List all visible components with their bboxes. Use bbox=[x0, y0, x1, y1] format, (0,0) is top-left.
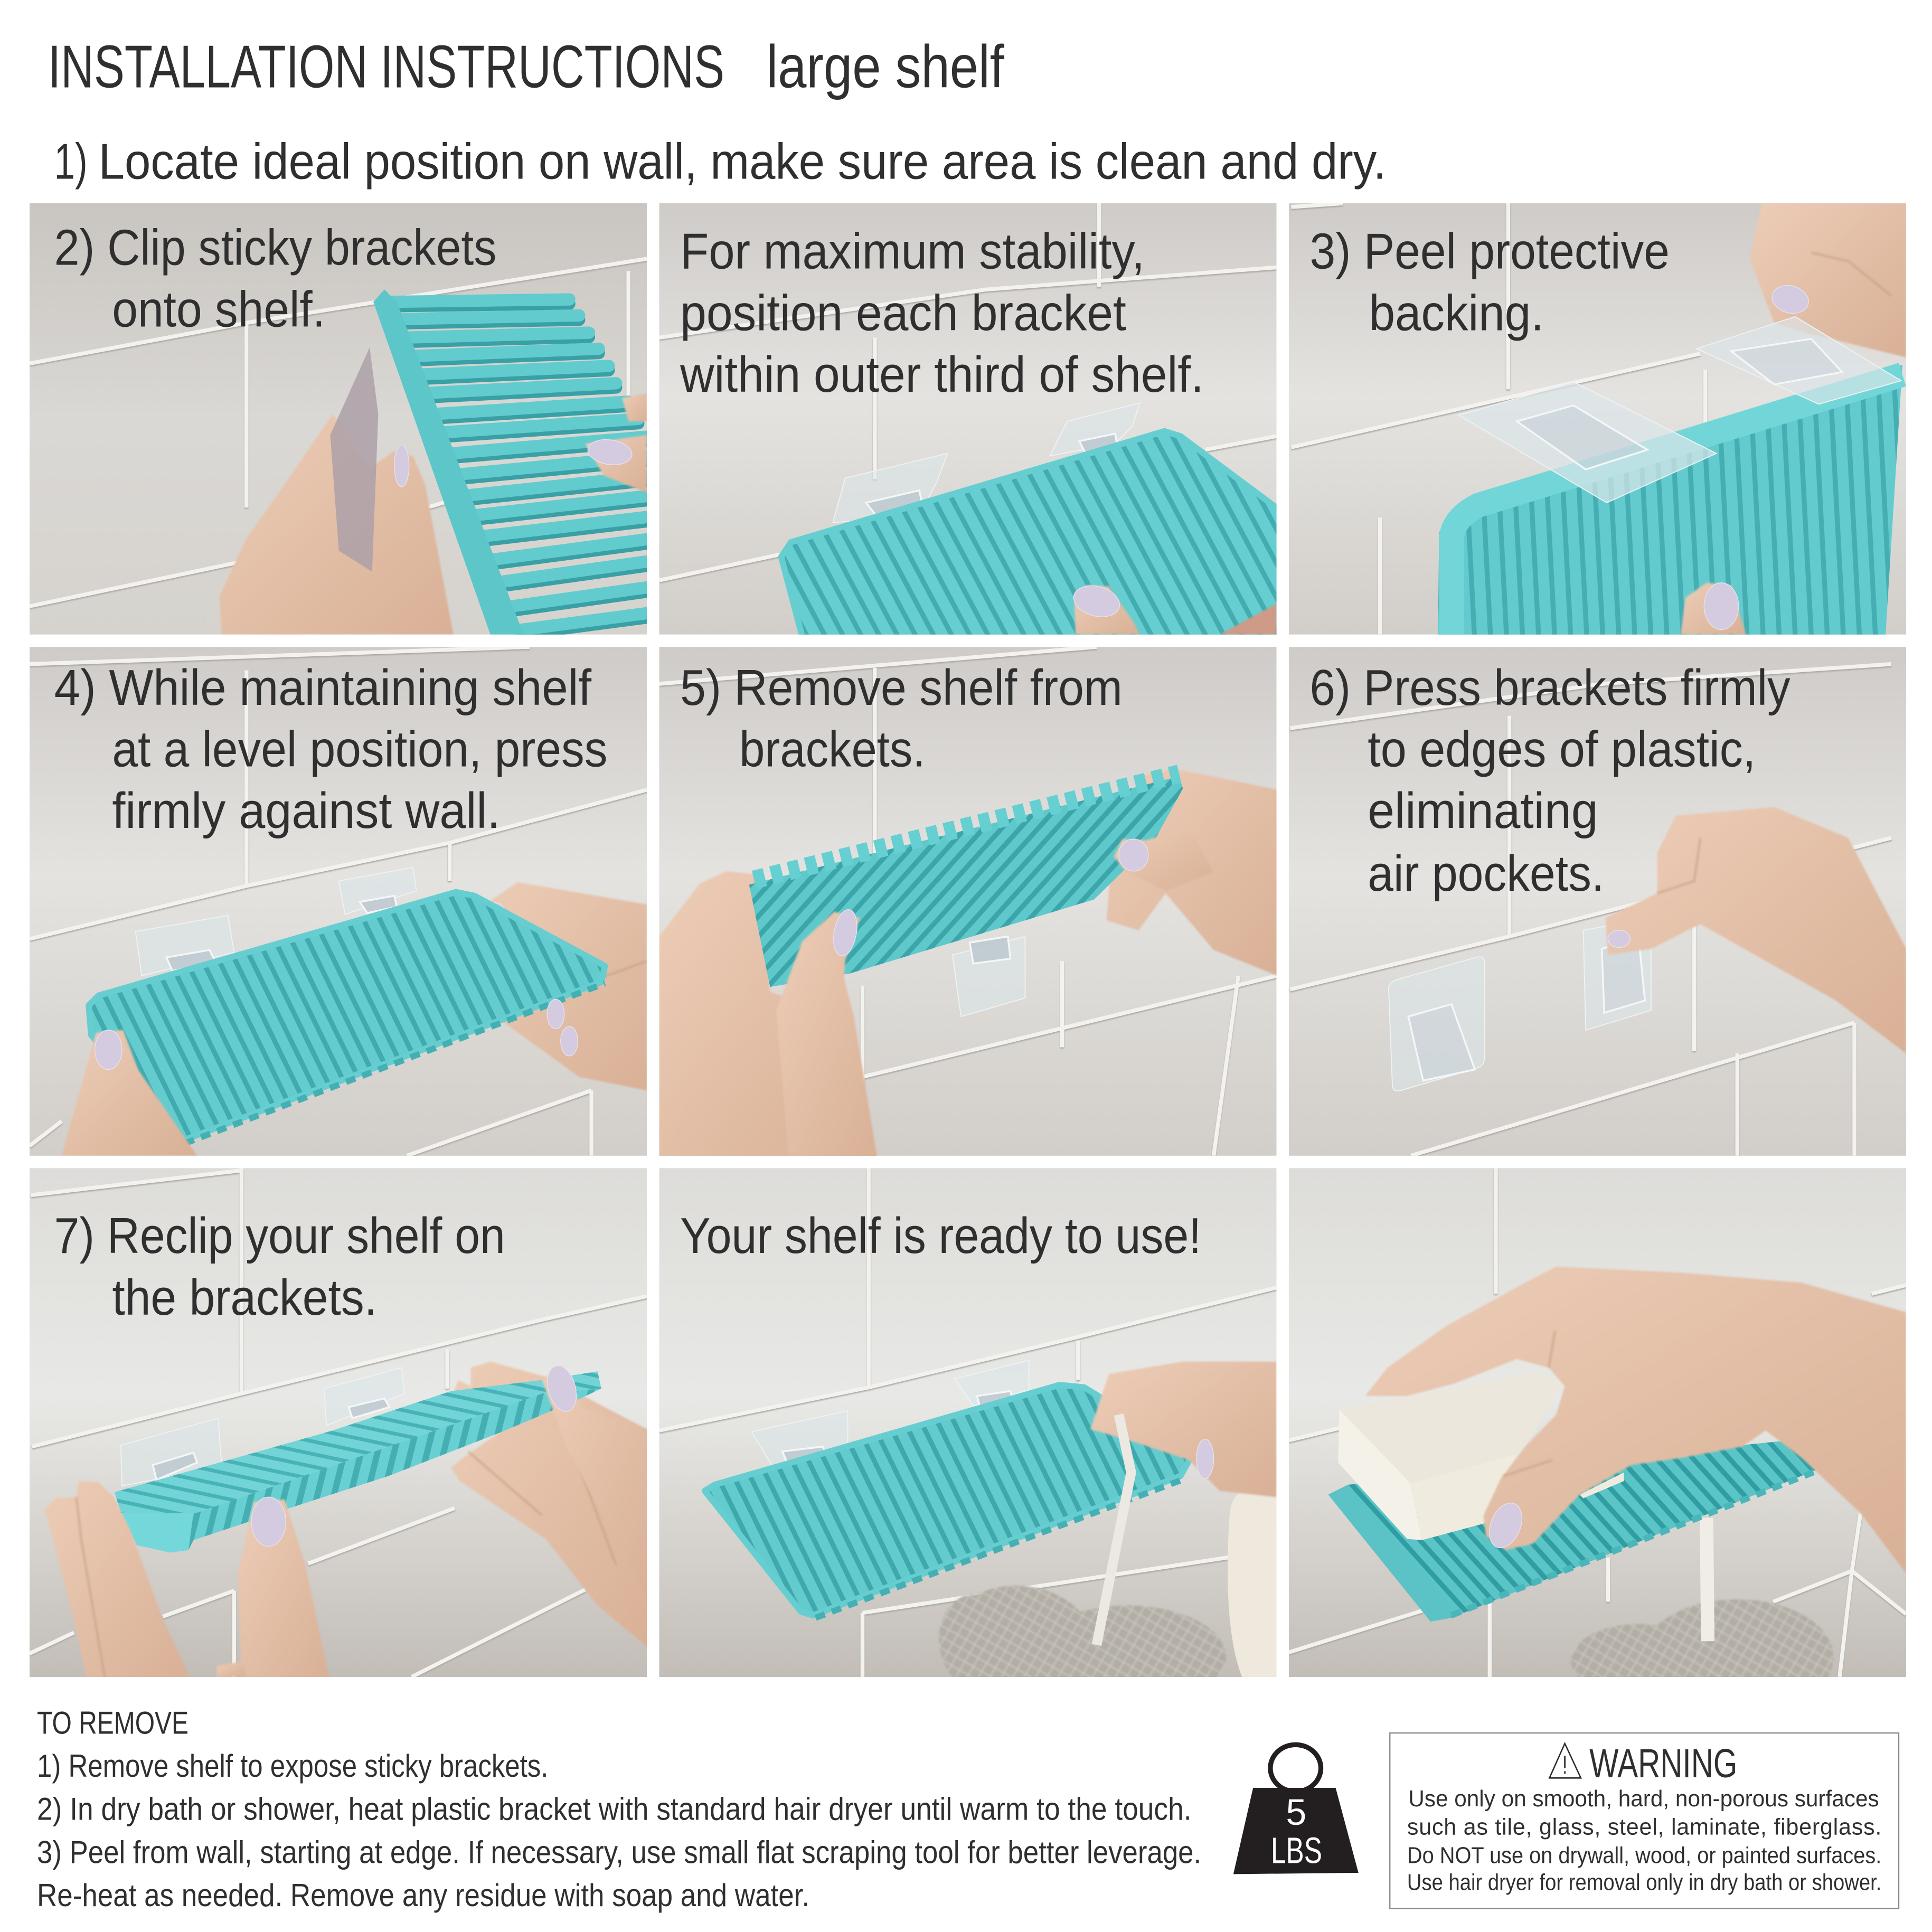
step 1 text: 1) bbox=[54, 133, 88, 190]
icon: 5 lbs weight bbox=[1233, 1745, 1359, 1874]
text: brackets. bbox=[739, 721, 925, 777]
text bbox=[56, 228, 495, 327]
text: 6) Press brackets firmly bbox=[1310, 659, 1790, 716]
icon: 5 lbs weight: LBS bbox=[1271, 1830, 1322, 1871]
shelf bbox=[781, 431, 1281, 640]
brackets bbox=[121, 1368, 404, 1486]
wall tiles bbox=[1289, 203, 1906, 635]
text bbox=[680, 659, 1123, 777]
title: INSTALLATION INSTRUCTIONS bbox=[48, 33, 724, 101]
hand bbox=[1365, 1267, 1906, 1573]
to remove instructions: 2) In dry bath or shower, heat plastic bracket with standard hair dryer until warm to the touch. bbox=[37, 1791, 1192, 1827]
wall tiles bbox=[1289, 647, 1906, 1156]
text: For maximum stability, bbox=[680, 223, 1145, 280]
text: to edges of plastic, bbox=[1368, 721, 1756, 777]
wall tiles bbox=[30, 647, 647, 1156]
brackets bbox=[751, 1360, 1029, 1473]
loofah bbox=[939, 1586, 1226, 1709]
step 1 text: Locate ideal position on wall, make sure area is clean and dry. bbox=[99, 133, 1386, 190]
text: eliminating bbox=[1368, 783, 1598, 839]
icon: warning triangle bbox=[1549, 1743, 1581, 1778]
panel: step 6 press brackets bbox=[1289, 647, 1906, 1156]
text: backing. bbox=[1369, 285, 1544, 341]
shelf bbox=[89, 892, 605, 1144]
panel: step 7 reclip bbox=[30, 1168, 649, 1677]
brackets bbox=[1389, 918, 1651, 1091]
panel: step 3 peel backing bbox=[1289, 203, 1906, 640]
right hand bbox=[451, 1362, 649, 1648]
hand peeling bbox=[1750, 203, 1906, 357]
soap bbox=[1338, 1373, 1624, 1540]
bottle bbox=[1228, 1488, 1277, 1677]
text bbox=[54, 1208, 505, 1326]
text: Your shelf is ready to use! bbox=[680, 1208, 1201, 1264]
title: large shelf bbox=[766, 33, 1004, 101]
to remove instructions: Re-heat as needed. Remove any residue with soap and water. bbox=[37, 1877, 809, 1913]
fingers bbox=[44, 1362, 649, 1677]
panel: step 4 press shelf bbox=[30, 647, 647, 1156]
hands behind shelf bbox=[659, 769, 1278, 1158]
warning heading: WARNING bbox=[1589, 1741, 1737, 1786]
text: onto shelf. bbox=[112, 281, 325, 337]
rope bbox=[1097, 1415, 1131, 1645]
panel: bracket position tip bbox=[659, 203, 1281, 640]
wall tiles bbox=[659, 1168, 1277, 1677]
warning text: such as tile, glass, steel, laminate, fiberglass. bbox=[1407, 1815, 1881, 1840]
wall tiles bbox=[30, 203, 647, 635]
text bbox=[54, 659, 607, 839]
warning text: Use only on smooth, hard, non-porous surfaces bbox=[1408, 1786, 1879, 1812]
text: within outer third of shelf. bbox=[680, 346, 1204, 403]
text: 5) Remove shelf from bbox=[680, 659, 1123, 716]
wall tiles bbox=[659, 647, 1277, 1156]
text: firmly against wall. bbox=[112, 783, 500, 839]
hand holding bracket bbox=[219, 347, 454, 635]
text: the brackets. bbox=[112, 1269, 377, 1326]
text: 7) Reclip your shelf on bbox=[54, 1208, 505, 1264]
text bbox=[680, 223, 1204, 403]
shelf ribs bbox=[373, 289, 653, 635]
panel: step 5 remove shelf bbox=[659, 647, 1278, 1158]
fingers bbox=[62, 1000, 578, 1156]
text: 2) Clip sticky brackets bbox=[54, 220, 496, 276]
text bbox=[1310, 659, 1790, 902]
shelf bbox=[115, 1371, 601, 1552]
right hand bbox=[473, 882, 647, 1090]
brackets bbox=[833, 403, 1140, 522]
warning text: Do NOT use on drywall, wood, or painted surfaces. bbox=[1407, 1843, 1881, 1868]
to remove instructions: 1) Remove shelf to expose sticky brackets. bbox=[37, 1748, 548, 1784]
wall tiles bbox=[1289, 1168, 1906, 1677]
icon: 5 lbs weight: 5 bbox=[1286, 1792, 1306, 1833]
brackets bbox=[136, 868, 417, 976]
to remove instructions: TO REMOVE bbox=[37, 1704, 189, 1740]
to remove instructions: 3) Peel from wall, starting at edge. If necessary, use small flat scraping tool for better leverage. bbox=[37, 1834, 1201, 1870]
loofah bbox=[1571, 1599, 1833, 1715]
text: air pockets. bbox=[1368, 845, 1604, 902]
panel: step 2 clip brackets bbox=[30, 203, 653, 635]
text: 4) While maintaining shelf bbox=[54, 659, 591, 716]
text: position each bracket bbox=[680, 285, 1126, 341]
text bbox=[1310, 223, 1670, 341]
panel: soap on shelf bbox=[1289, 1168, 1906, 1715]
hand bbox=[1606, 807, 1906, 1053]
brackets bbox=[1459, 317, 1901, 503]
bracket bbox=[953, 936, 1025, 1016]
wall tiles bbox=[30, 1168, 647, 1677]
to remove instructions bbox=[37, 1704, 1201, 1913]
shelf bbox=[705, 1385, 1193, 1618]
shelf bbox=[1328, 1440, 1816, 1622]
shelf bbox=[1438, 365, 1902, 640]
finger bbox=[1070, 581, 1277, 635]
warning text bbox=[1407, 1786, 1881, 1896]
fingers behind shelf bbox=[585, 393, 647, 493]
text: at a level position, press bbox=[112, 721, 607, 777]
warning box bbox=[1390, 1733, 1899, 1909]
thumbs bbox=[776, 827, 1214, 1158]
rope bbox=[1707, 1518, 1708, 1641]
panel: ready to use bbox=[659, 1168, 1277, 1709]
finger bbox=[1681, 583, 1746, 635]
warning text: Use hair dryer for removal only in dry bath or shower. bbox=[1407, 1870, 1881, 1896]
text: 3) Peel protective bbox=[1310, 223, 1670, 280]
wall tiles bbox=[659, 203, 1277, 635]
hand bbox=[1090, 1362, 1277, 1497]
shelf bbox=[749, 774, 1183, 987]
